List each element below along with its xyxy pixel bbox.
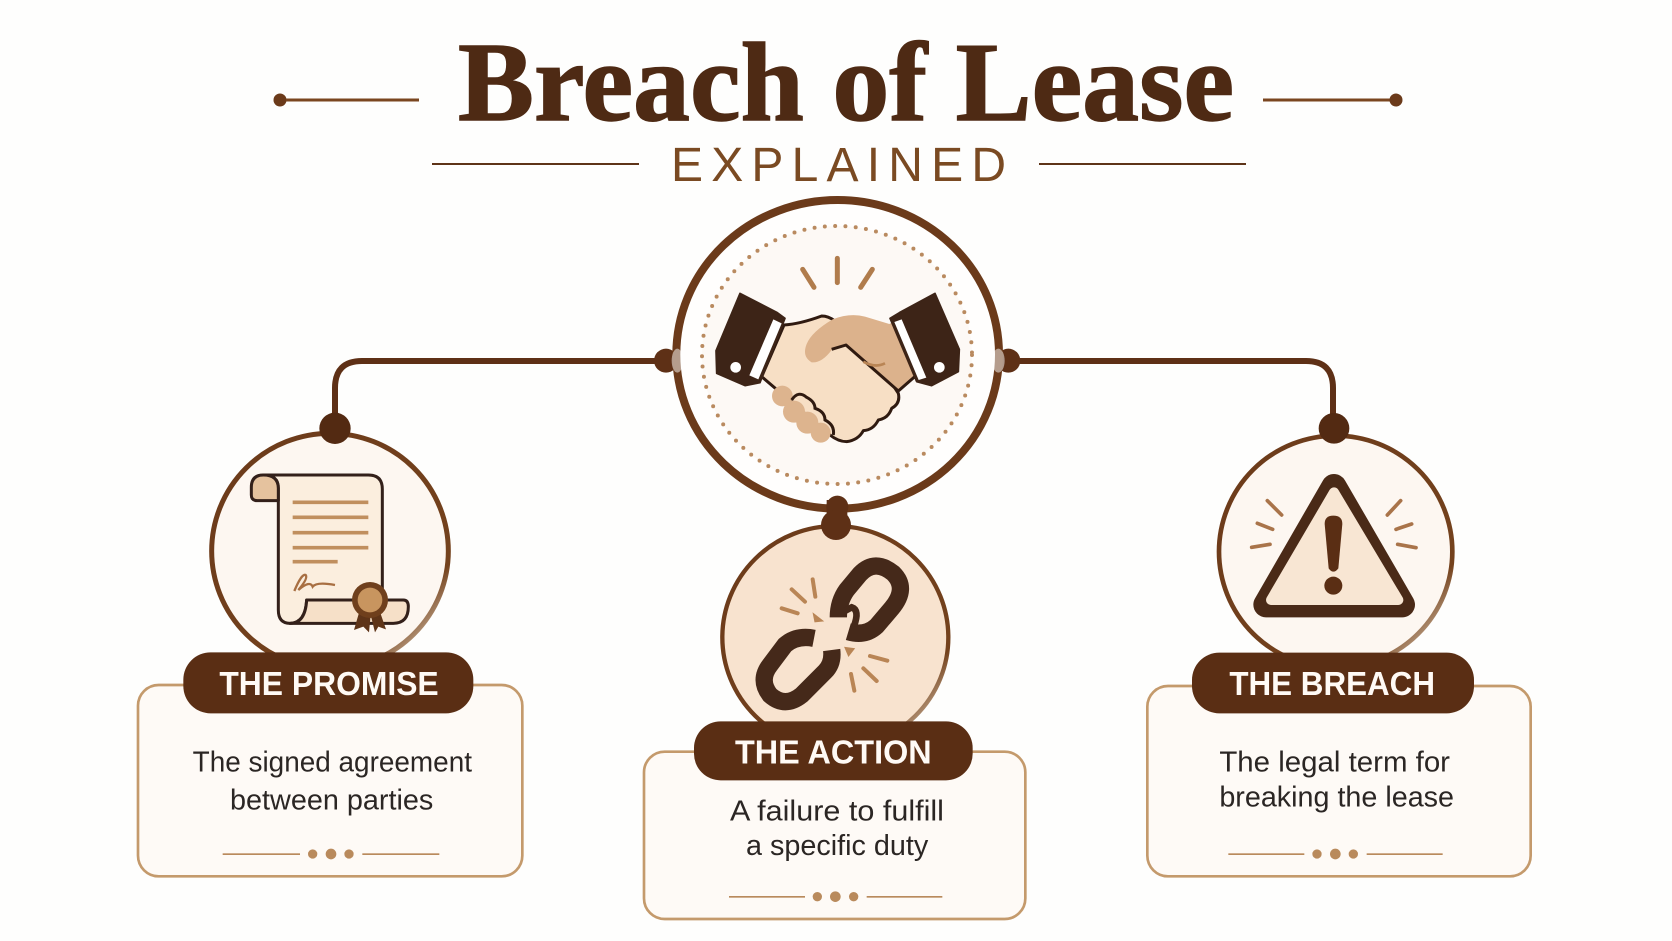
label pill	[1192, 653, 1474, 713]
connector knob	[821, 500, 851, 540]
label pill: THE ACTION	[735, 734, 932, 771]
fingers	[772, 386, 831, 443]
icon: contract scroll	[251, 475, 408, 632]
seal	[352, 582, 388, 618]
title	[274, 21, 1402, 192]
ring highlights	[672, 349, 1005, 373]
left cuff	[716, 293, 785, 386]
description	[730, 796, 944, 862]
description: breaking the lease	[1219, 782, 1454, 814]
top curl	[251, 475, 278, 501]
connector dot	[1319, 413, 1349, 444]
icon circle	[212, 433, 448, 669]
icon circle	[1219, 436, 1452, 668]
dotted inner ring	[702, 226, 972, 484]
card divider	[729, 891, 942, 902]
panel: handshake medallion	[654, 200, 1020, 523]
panel: the promise	[138, 413, 522, 876]
icon: warning triangle	[1252, 487, 1416, 605]
description: The signed agreement	[193, 747, 472, 779]
triangle inner	[1271, 492, 1398, 600]
card divider	[223, 849, 439, 859]
right cuff	[890, 293, 959, 386]
subtitle: EXPLAINED	[671, 139, 1006, 192]
label pill: THE PROMISE	[219, 666, 439, 703]
icon circle	[722, 526, 948, 749]
label pill: THE BREACH	[1229, 666, 1435, 703]
tan hand	[805, 315, 918, 391]
card	[138, 685, 522, 876]
upper link	[838, 566, 900, 633]
icon: broken chain	[764, 566, 900, 702]
bottom roll	[290, 600, 408, 623]
exclamation mark	[1324, 516, 1342, 595]
label pill	[183, 652, 473, 713]
finger scallops	[792, 394, 834, 435]
card divider	[1228, 849, 1443, 859]
connector lines	[335, 361, 1333, 425]
card	[644, 752, 1025, 919]
text lines	[293, 502, 368, 562]
connector dot	[319, 413, 351, 444]
description: The legal term for	[1219, 747, 1450, 779]
description	[193, 747, 472, 816]
light hand	[762, 316, 899, 442]
description	[1219, 747, 1454, 814]
sparks	[1252, 501, 1416, 548]
card	[1147, 686, 1531, 876]
side knobs	[654, 349, 1020, 373]
lower link	[764, 637, 832, 702]
label pill	[694, 721, 973, 780]
description: A failure to fulfill	[730, 796, 944, 828]
hand crease lines	[832, 345, 917, 391]
upper link hook	[842, 607, 857, 626]
signature	[294, 575, 335, 591]
outer ring	[676, 200, 999, 509]
ribbons	[354, 610, 386, 632]
triangle outer	[1266, 487, 1402, 605]
description: a specific duty	[746, 830, 929, 862]
title ornament left	[274, 94, 419, 106]
panel: the action	[644, 500, 1025, 919]
title text: Breach of Lease	[458, 21, 1234, 145]
paper	[263, 475, 382, 623]
icon: handshake	[716, 258, 959, 443]
title ornament right	[1263, 94, 1402, 106]
description: between parties	[230, 784, 433, 816]
sparks	[782, 579, 887, 691]
spark lines	[803, 258, 872, 287]
bottom knob	[826, 496, 848, 523]
panel: the breach	[1147, 413, 1531, 876]
